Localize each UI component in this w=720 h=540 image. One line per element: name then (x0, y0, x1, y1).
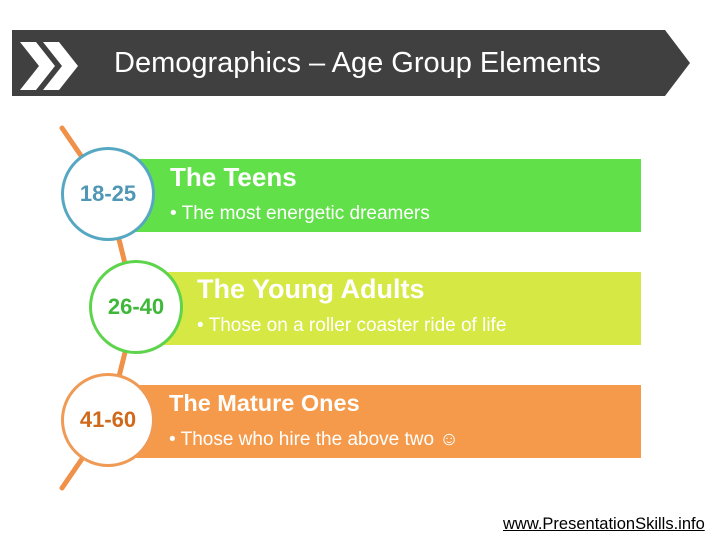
panel: young adults (140, 272, 641, 345)
title text: Demographics – Age Group Elements (114, 47, 601, 79)
circle: 18-25 (61, 147, 155, 241)
bullet: young adults: • Those on a roller coaster ride of life (197, 315, 506, 336)
panel: mature (110, 385, 641, 458)
bullet: teens: • The most energetic dreamers (170, 203, 430, 224)
bullet: mature: • Those who hire the above two ☺ (169, 429, 459, 450)
circle: 41-60 (61, 373, 155, 467)
circle: 18-25: 18-25 (80, 181, 136, 206)
circle: 41-60: 41-60 (80, 407, 136, 432)
panel: teens (110, 159, 641, 232)
title banner (12, 30, 690, 96)
footer link: www.PresentationSkills.info (503, 515, 705, 533)
heading: mature: The Mature Ones (169, 390, 360, 416)
circle: 26-40 (89, 260, 183, 354)
heading: young adults: The Young Adults (197, 274, 424, 304)
circle: 26-40: 26-40 (108, 294, 164, 319)
heading: teens: The Teens (170, 162, 297, 192)
